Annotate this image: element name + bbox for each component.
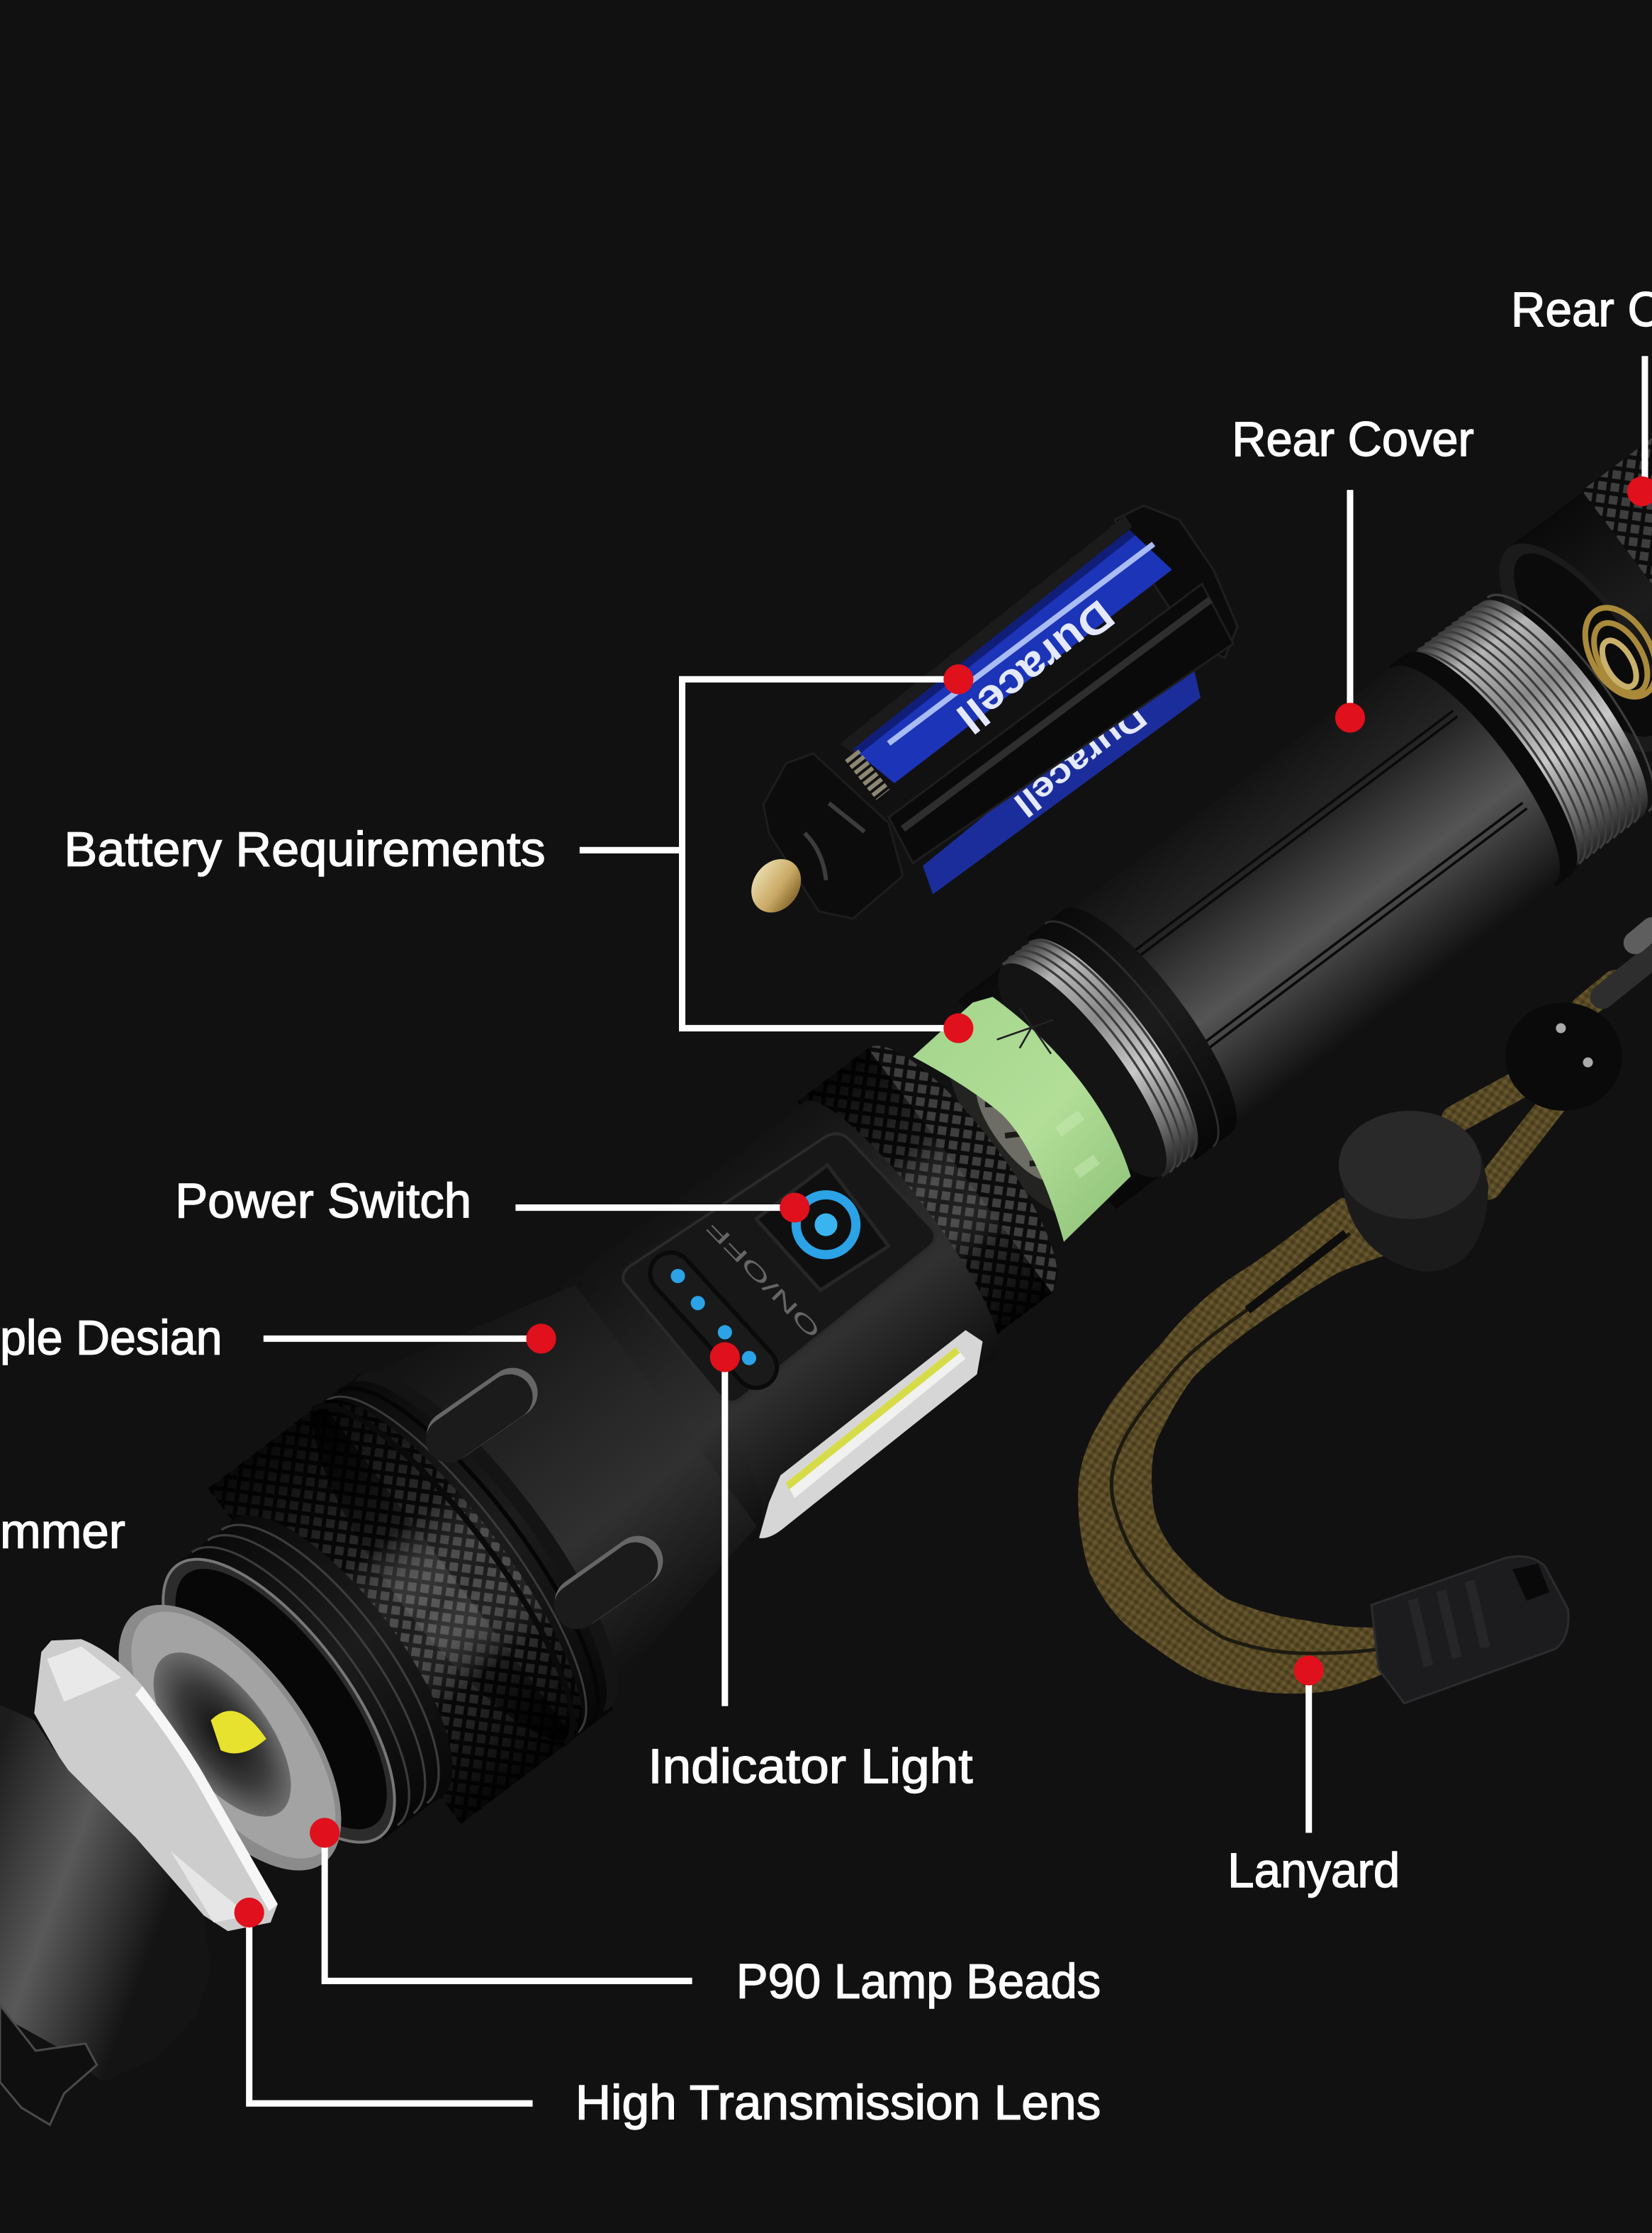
strap clip: [1602, 957, 1652, 997]
lower battery: [923, 666, 1201, 895]
lens: [34, 1639, 278, 1931]
lower battery: Duracell: [1007, 698, 1154, 824]
rear silver thread: [1373, 570, 1652, 899]
upper battery: Duracell: [948, 591, 1123, 743]
flashlight front assembly: [43, 986, 1128, 1948]
callout: simple design: [0, 1311, 556, 1365]
head knurl: [208, 1368, 620, 1824]
dark ring: [958, 944, 1191, 1209]
spring contact: [852, 755, 883, 795]
callout: rear cover: Rear Cover: [1232, 413, 1474, 466]
callout: power switch: [175, 1175, 809, 1229]
callout: high transmission lens: [235, 1898, 1101, 2130]
collar grip grooves: [449, 1393, 638, 1606]
indicator slot: [670, 1269, 756, 1367]
cord slider: [1339, 1111, 1488, 1272]
front silver thread: [1001, 918, 1223, 1178]
rear cap spring: [1570, 595, 1652, 709]
upper cords: [1456, 1071, 1544, 1119]
cord bead: [1505, 1002, 1622, 1111]
callout: rear cover: [1232, 413, 1474, 733]
lamp bead plate: [77, 1568, 383, 1908]
far cap: [1115, 505, 1237, 658]
rear cover tube: [1064, 644, 1585, 1131]
callout: indicator light: Indicator Light: [648, 1740, 972, 1793]
on/off text: ON/OFF: [702, 1216, 825, 1343]
flashlight rear assembly: [886, 431, 1652, 1256]
zoom collar: [360, 1216, 816, 1699]
knurled grip ring: [797, 1023, 1086, 1346]
threaded neck: [175, 1482, 491, 1841]
crenellated strike ring: [0, 2005, 97, 2125]
flashlight bezel: [0, 1705, 210, 2125]
front barrel: [558, 1082, 1023, 1541]
callout: rear cap: [1511, 283, 1652, 506]
cord gap: [1247, 1233, 1346, 1310]
centre spine: [889, 584, 1233, 863]
callout: high transmission lens: High Transmission Lens: [575, 2076, 1101, 2130]
upper battery: [853, 530, 1172, 783]
head opening: [122, 1524, 435, 1877]
callout: battery requirements: [64, 664, 973, 1043]
callout: power switch: Power Switch: [175, 1175, 471, 1229]
green battery: [913, 997, 1131, 1242]
callout: P90 lamp beads: P90 Lamp Beads: [736, 1955, 1101, 2009]
callout: simple design: ple Desian: [0, 1311, 222, 1365]
callout: lanyard: [1227, 1655, 1400, 1898]
lanyard: [1078, 929, 1652, 1694]
power switch: [756, 1165, 889, 1290]
rear end cap: [1469, 431, 1652, 787]
lanyard buckle: [1371, 1556, 1568, 1703]
callout: P90 lamp beads: [310, 1818, 1101, 2009]
callout: lanyard: Lanyard: [1227, 1844, 1400, 1898]
black head rings: [299, 1339, 658, 1755]
gold contact: [741, 849, 811, 922]
front black seal bands: [1027, 887, 1262, 1160]
LED bead: [210, 1711, 266, 1753]
COB side light: [759, 1330, 983, 1538]
callout: battery requirements: Battery Requirements: [64, 822, 546, 876]
near cap: [763, 754, 903, 919]
label: dimmer: mmer: [0, 1505, 125, 1559]
battery holder: [741, 505, 1237, 922]
cord divider: [1111, 1233, 1387, 1653]
top frame rail: [841, 515, 1133, 755]
battery inner contacts: [921, 1012, 1123, 1241]
callout: indicator light: [648, 1342, 972, 1793]
switch recess: [623, 1134, 935, 1402]
paired cord: [1078, 1198, 1417, 1694]
